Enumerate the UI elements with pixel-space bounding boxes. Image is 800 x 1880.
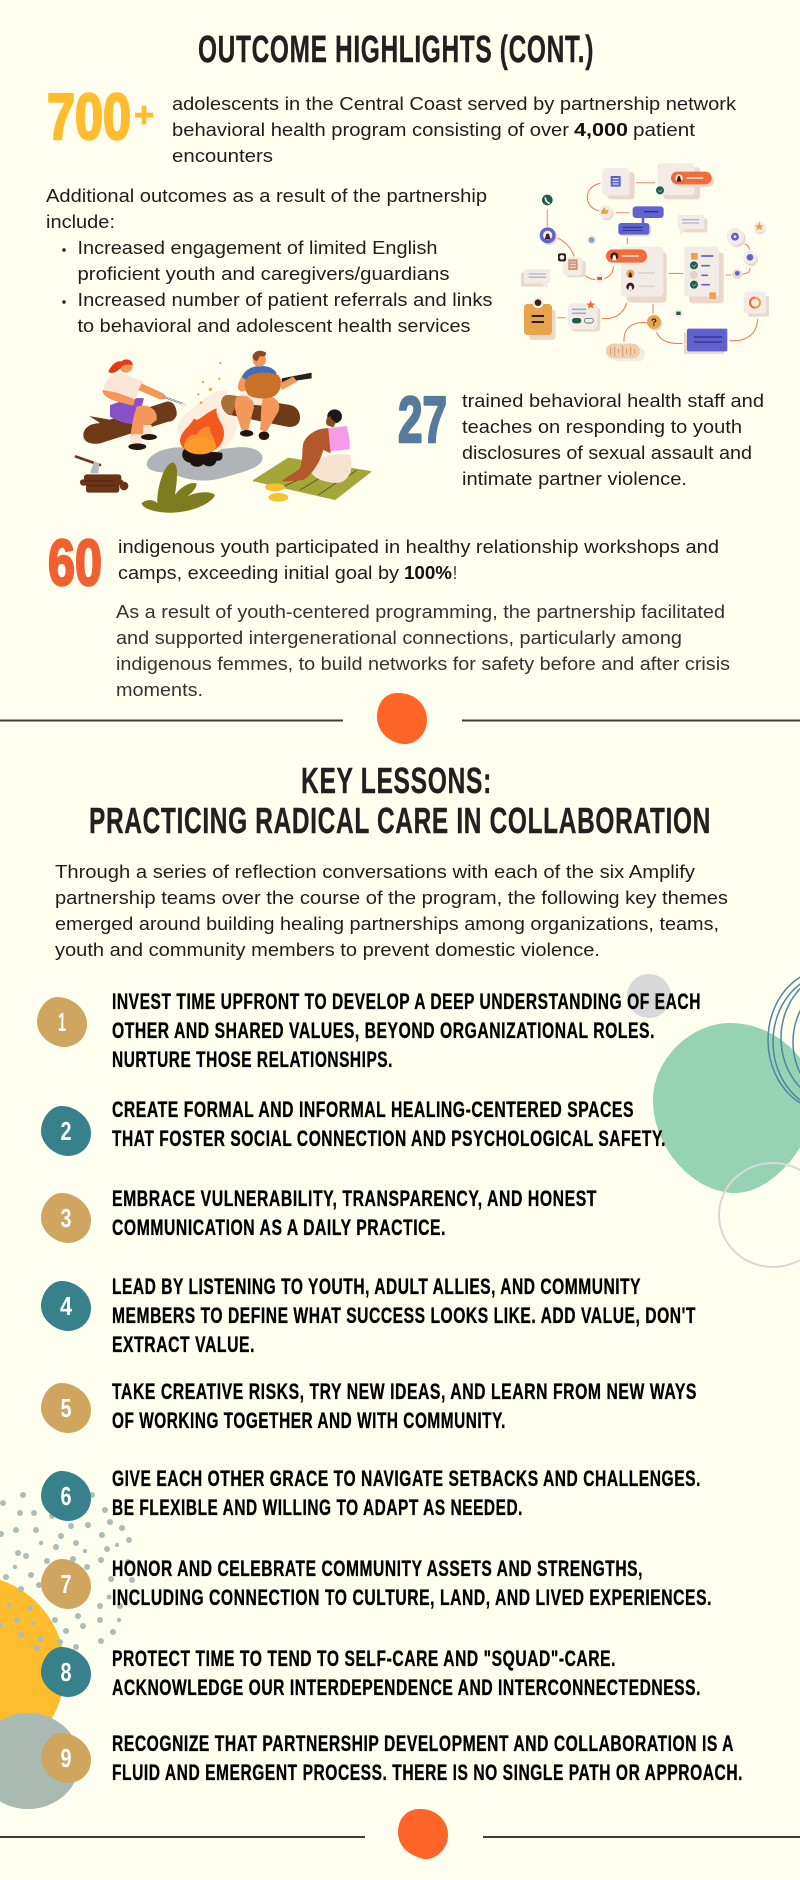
stat description: camps, exceeding initial goal by: [118, 562, 400, 583]
stat description: behavioral health program consisting of over: [172, 119, 569, 140]
big number 60: 60: [48, 526, 102, 599]
stat description: disclosures of sexual assault and: [462, 442, 752, 463]
intro paragraph: youth and community members to prevent domestic violence.: [55, 939, 600, 960]
big number 700+: +: [134, 96, 154, 135]
lesson 3 text: COMMUNICATION AS A DAILY PRACTICE.: [112, 1215, 446, 1240]
supporting paragraph: indigenous femmes, to build networks for safety before and after crisis: [116, 653, 730, 674]
lesson 9: [41, 1731, 743, 1785]
lesson 6 text: [112, 1466, 701, 1520]
title: outcome highlights: OUTCOME HIGHLIGHTS (CONT.): [198, 29, 594, 71]
illustration: people around a campfire: [76, 351, 371, 513]
stat: 700+ adolescents: [47, 80, 737, 166]
number badge 4: [41, 1281, 91, 1331]
stat description: adolescents in the Central Coast served by partnership network: [172, 93, 737, 114]
number badge 7: 7: [60, 1569, 72, 1599]
lesson 4: [41, 1274, 696, 1357]
lesson 4 text: EXTRACT VALUE.: [112, 1332, 255, 1357]
number badge 4: 4: [60, 1291, 72, 1321]
stat description: [118, 536, 719, 583]
lesson 5 text: OF WORKING TOGETHER AND WITH COMMUNITY.: [112, 1408, 506, 1433]
stat description: 100%: [404, 562, 452, 583]
lesson 8: [41, 1646, 701, 1700]
lesson 9 text: [112, 1731, 743, 1785]
stat description: encounters: [172, 145, 273, 166]
stat description: trained behavioral health staff and: [462, 390, 764, 411]
number badge 8: [41, 1647, 91, 1697]
number badge 5: 5: [60, 1393, 72, 1423]
intro paragraph: [55, 861, 728, 960]
lesson 2 text: [112, 1097, 666, 1151]
number badge 6: [41, 1471, 91, 1521]
additional outcomes text block: include:: [46, 211, 115, 232]
number badge 5: [41, 1383, 91, 1433]
lesson 5: [41, 1379, 697, 1433]
big number 700+: 700: [47, 80, 131, 153]
additional outcomes text block: Increased engagement of limited English: [78, 237, 438, 258]
stat: 60 indigenous youth: [48, 526, 730, 700]
stat description: [462, 390, 764, 489]
lesson 3: [41, 1186, 597, 1243]
stat description: patient: [633, 119, 695, 140]
lesson 8 text: [112, 1646, 701, 1700]
lesson 6 text: BE FLEXIBLE AND WILLING TO ADAPT AS NEEDED.: [112, 1495, 523, 1520]
decorative shapes: right side: [627, 969, 800, 1267]
lesson 5 text: [112, 1379, 697, 1433]
stat description: [172, 93, 737, 166]
lesson 3 text: [112, 1186, 597, 1240]
number badge 7: [41, 1559, 91, 1609]
illustration: network of connected cards: ?: [651, 318, 657, 329]
stat description: intimate partner violence.: [462, 468, 687, 489]
additional outcomes text block: proficient youth and caregivers/guardians: [78, 263, 450, 284]
number badge 3: 3: [60, 1203, 72, 1233]
illustration: network of connected cards: [521, 163, 769, 361]
lesson 6: [41, 1466, 701, 1521]
additional outcomes text block: to behavioral and adolescent health services: [78, 315, 470, 336]
stat: 27 trained staff: [398, 383, 764, 489]
supporting paragraph: moments.: [116, 679, 203, 700]
number badge 1: [37, 997, 87, 1047]
number badge 2: 2: [60, 1116, 72, 1146]
supporting paragraph: As a result of youth-centered programming, the partnership facilitated: [116, 601, 725, 622]
number badge 9: 9: [60, 1743, 72, 1773]
stat description: !: [453, 562, 457, 583]
additional outcomes text block: Additional outcomes as a result of the partnership: [46, 185, 487, 206]
heading: key lessons: [89, 760, 711, 841]
stat description: teaches on responding to youth: [462, 416, 742, 437]
big number 27: 27: [398, 383, 447, 456]
number badge 8: 8: [60, 1657, 72, 1687]
lesson 1 text: NURTURE THOSE RELATIONSHIPS.: [112, 1047, 393, 1072]
additional outcomes text block: Increased number of patient referrals and links: [78, 289, 493, 310]
lesson 3 text: EMBRACE VULNERABILITY, TRANSPARENCY, AND HONEST: [112, 1186, 597, 1211]
lesson 1: [37, 989, 701, 1072]
lesson 7: [41, 1556, 712, 1610]
intro paragraph: emerged around building healing partnerships among organizations, teams,: [55, 913, 719, 934]
number badge 6: 6: [60, 1481, 72, 1511]
number badge 9: [41, 1733, 91, 1783]
supporting paragraph: [116, 601, 730, 700]
heading: key lessons: KEY LESSONS:: [301, 760, 492, 801]
supporting paragraph: and supported intergenerational connections, particularly among: [116, 627, 682, 648]
additional outcomes text block: [46, 185, 493, 336]
intro paragraph: partnership teams over the course of the program, the following key themes: [55, 887, 728, 908]
lesson 4 text: [112, 1274, 696, 1357]
lesson 1 text: [112, 989, 701, 1072]
lesson 2: [41, 1097, 666, 1156]
lesson 7 text: [112, 1556, 712, 1610]
number badge 1: 1: [58, 1007, 66, 1037]
number badge 2: [41, 1106, 91, 1156]
section divider with orange blob: [0, 693, 800, 744]
stat description: indigenous youth participated in healthy relationship workshops and: [118, 536, 719, 557]
decorative shapes: lower left circles and dots: [0, 1492, 135, 1809]
number badge 3: [41, 1193, 91, 1243]
stat description: 4,000: [574, 119, 628, 140]
bottom divider with orange blob: [0, 1809, 800, 1859]
intro paragraph: Through a series of reflection conversations with each of the six Amplify: [55, 861, 696, 882]
